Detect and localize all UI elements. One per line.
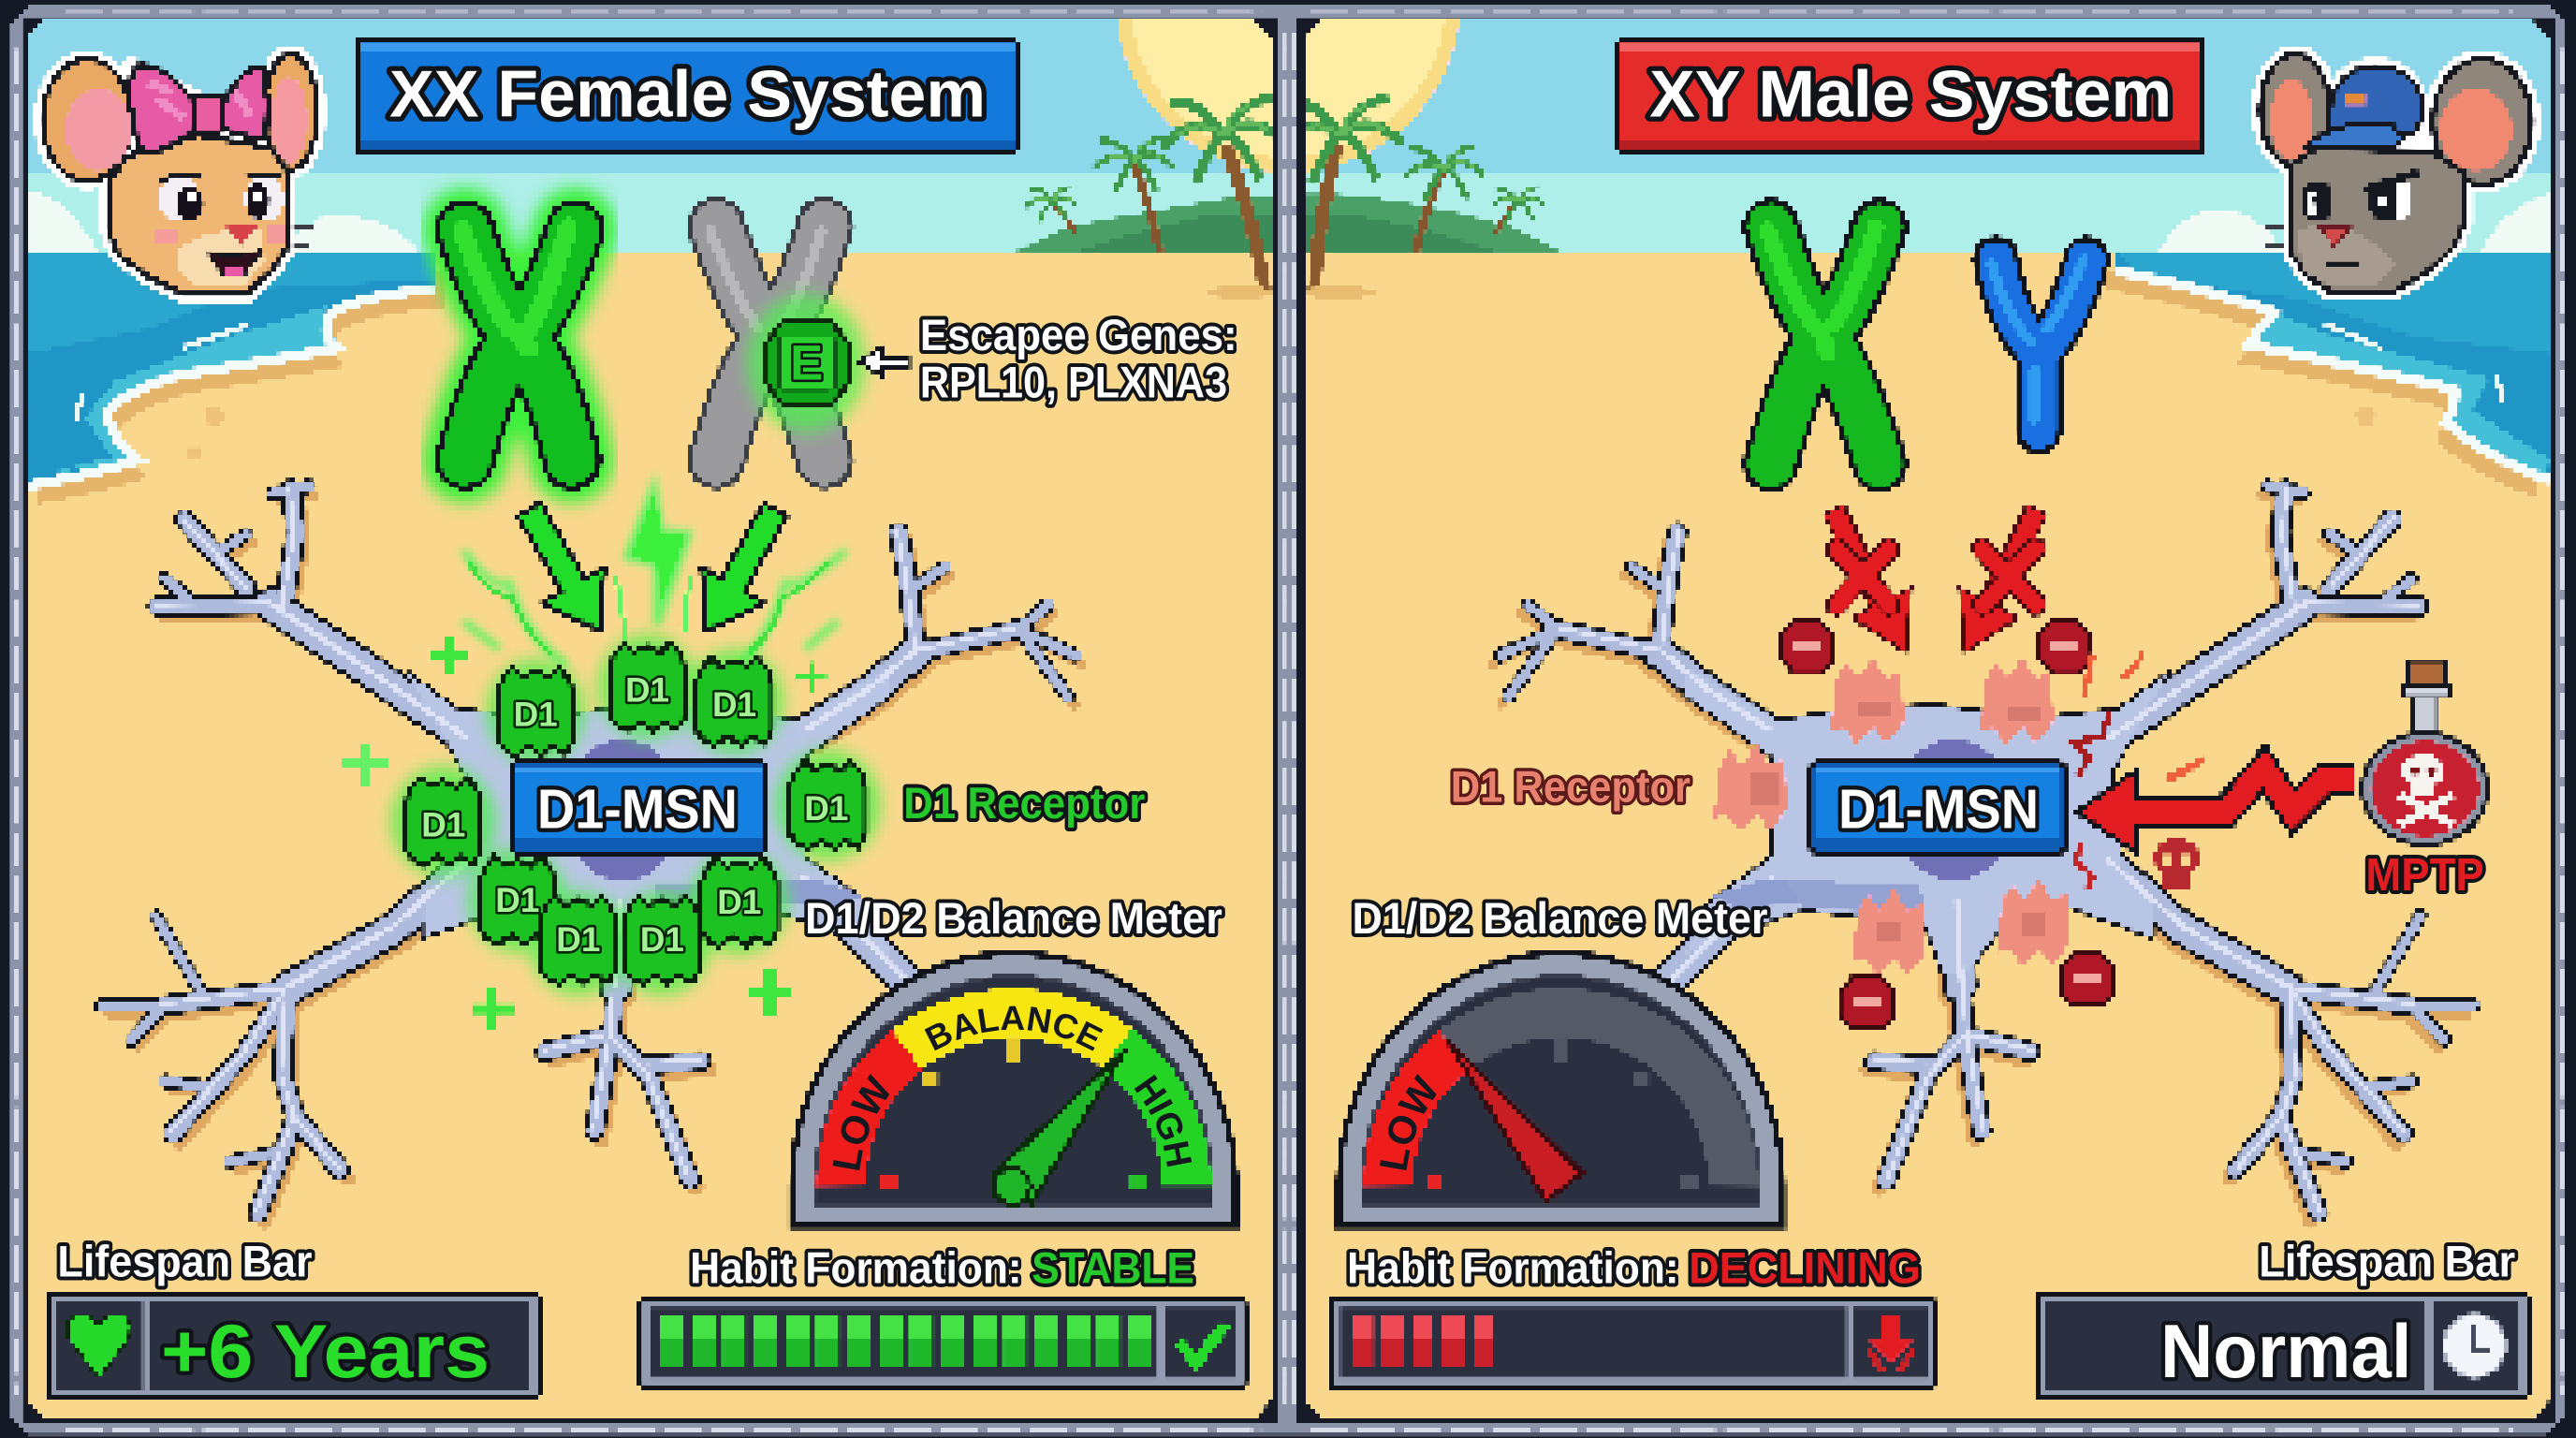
icon: MPTP poison flask: [2363, 661, 2487, 844]
escapee gene marker E: [748, 294, 866, 433]
arrow: points to E: [859, 346, 909, 376]
neuron: right: [1493, 487, 2474, 1221]
title banner: XX: [357, 39, 1017, 153]
label: lifespan bar: Lifespan Bar: [2259, 1238, 2515, 1287]
D1 receptor letters: D1: [717, 883, 761, 921]
D1 receptor letters: D1: [804, 789, 848, 828]
label: habit formation declining: DECLINING: [1689, 1244, 1921, 1294]
beach background: right: [1306, 19, 2551, 1418]
icon: heart: [67, 1314, 130, 1379]
panel frame: left: [11, 4, 1288, 1434]
cracks and sparks: [2073, 654, 2204, 890]
lifespan value: +6 Years: [161, 1310, 490, 1394]
gauge scale words: HIGH: [1134, 1075, 1193, 1167]
icon: clock: [2443, 1314, 2506, 1377]
D1-MSN text: D1-MSN: [1838, 778, 2039, 841]
beach background: left: [28, 19, 1273, 1418]
title: XX Female System: XX Female System: [389, 57, 986, 131]
plus signs: [344, 636, 827, 1030]
chromosome: blue Y: [1991, 259, 2086, 431]
gauge scale word: LOW: [1380, 1074, 1437, 1170]
gauge title: D1/D2 Balance Meter: [805, 894, 1222, 944]
label: habit formation stable: Habit Formation:: [690, 1244, 1022, 1294]
label: damaged D1 receptor: D1 Receptor: [1451, 762, 1690, 812]
habit bar: declining: [1331, 1299, 1936, 1388]
panel frame: right: [1288, 4, 2565, 1434]
D1 receptor letters: D1: [495, 881, 539, 919]
gauge scale words: BALANCE: [925, 1005, 1103, 1051]
panel: XX female system: [9, 5, 1287, 1436]
lifespan bar frame: left: [48, 1293, 539, 1399]
label: D1 receptor: D1 Receptor: [903, 779, 1145, 829]
D1 receptor letters: D1: [514, 696, 558, 734]
D1 receptor letters: D1: [640, 920, 684, 959]
chromosome: grey inactive X: [710, 227, 825, 460]
mouse: XX female: [43, 54, 317, 294]
label: escapee genes: RPL10, PLXNA3: [920, 359, 1227, 408]
neuron: left: [102, 487, 1083, 1221]
label: escapee genes: Escapee Genes:: [920, 311, 1237, 360]
damaged D1 receptors: [1714, 657, 2070, 976]
gauge title: D1/D2 Balance Meter: [1352, 894, 1767, 944]
habit bar: stable: [640, 1299, 1245, 1388]
lifespan value: Normal: [2160, 1310, 2411, 1394]
D1 receptors: abundant: [391, 634, 881, 996]
mouse: XY male: [2261, 54, 2532, 292]
label: habit formation declining: Habit Formation:: [1347, 1244, 1679, 1294]
gauge: balance high: [792, 953, 1236, 1225]
title banner: XY: [1618, 39, 2203, 153]
label: MPTP: MPTP: [2365, 850, 2484, 901]
chromosome: green X: [461, 227, 575, 460]
gauge scale words: [833, 1005, 1193, 1170]
D1 receptor letters: D1: [625, 670, 669, 709]
chromosome: green X: [1767, 227, 1880, 463]
blocked arrows: [1823, 505, 2047, 653]
gauge scale words: LOW: [833, 1074, 889, 1170]
D1-MSN label plate: left: [511, 762, 766, 853]
label: lifespan bar: Lifespan Bar: [57, 1238, 312, 1287]
D1 receptor letters: [421, 670, 848, 959]
D1 receptor letters: D1: [556, 920, 600, 959]
D1 receptor letters: D1: [712, 685, 756, 724]
D1-MSN text: D1-MSN: [537, 778, 738, 841]
activation sparks and bolt: [463, 488, 846, 666]
arrows: X chromosomes activate D1: [518, 503, 787, 631]
E gene letter: E: [790, 335, 823, 390]
lifespan bar frame: right: [2037, 1293, 2528, 1399]
gauge: balance low: [1339, 953, 1782, 1225]
inhibition markers: [1781, 621, 2115, 1029]
panel: XY male system: [1287, 5, 2565, 1436]
D1 receptor letters: D1: [421, 805, 465, 844]
D1-MSN label plate: right: [1810, 762, 2065, 853]
label: habit formation stable: STABLE: [1032, 1244, 1194, 1294]
toxic arrow: [2076, 769, 2352, 853]
title: XY Male System: XY Male System: [1649, 57, 2172, 131]
icon: small skull: [2154, 838, 2200, 889]
